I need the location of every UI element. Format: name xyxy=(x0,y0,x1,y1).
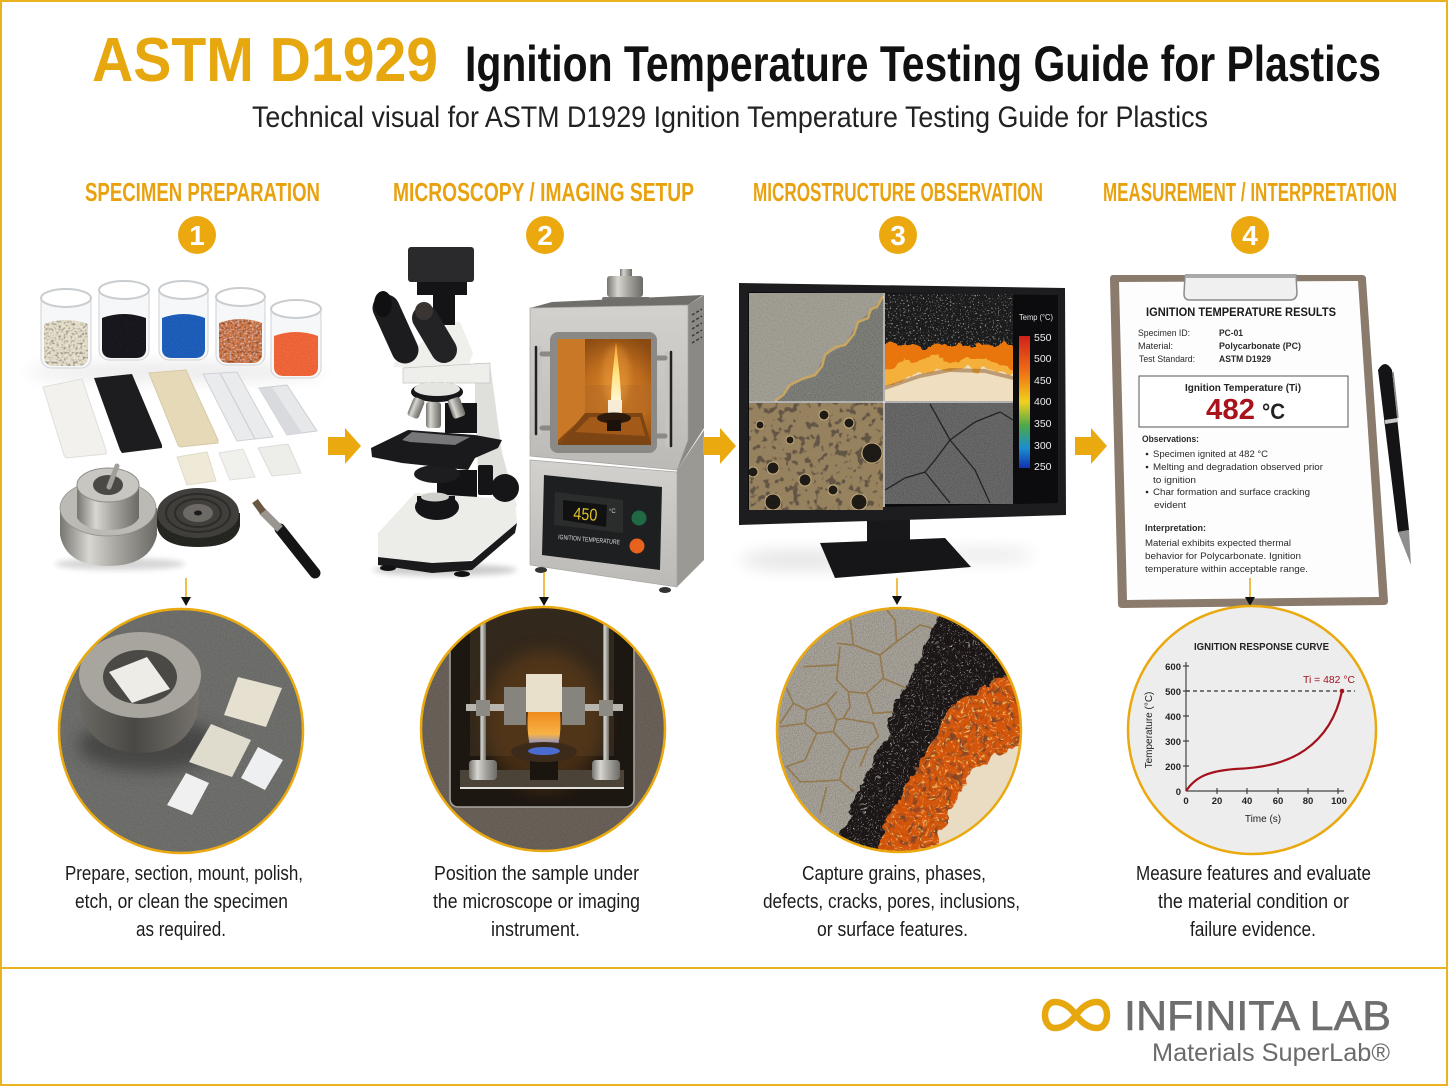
caption: step 1 xyxy=(65,863,303,941)
interpretation: Interpretation: xyxy=(1145,523,1206,534)
specimen details: Specimen ID: xyxy=(1138,328,1190,338)
observations: Char formation and surface cracking xyxy=(1153,487,1310,498)
side vents xyxy=(692,309,702,343)
caption: step 1: as required. xyxy=(136,919,226,941)
axis labels xyxy=(1144,662,1347,825)
plastic test strips xyxy=(43,370,317,485)
caption: step 3: Capture grains, phases, xyxy=(802,863,986,885)
step number 1: 1 xyxy=(189,220,205,251)
observations: Specimen ignited at 482 °C xyxy=(1153,449,1268,460)
axis labels: 40 xyxy=(1242,796,1252,807)
caption: step 4 xyxy=(1136,863,1371,941)
caption: step 4: the material condition or xyxy=(1158,891,1349,913)
micrograph: burn front xyxy=(885,294,1013,401)
icon: metal mounting press xyxy=(60,466,157,566)
axis labels: 0 xyxy=(1176,787,1181,798)
step headings and numbers xyxy=(85,177,1397,254)
title xyxy=(92,26,1381,95)
arrow xyxy=(703,428,736,464)
control panel xyxy=(542,475,662,570)
ignition temperature box: °C xyxy=(1262,399,1285,424)
icon: pen xyxy=(1378,364,1411,565)
detail circle: charred microstructure xyxy=(776,606,1022,854)
camera xyxy=(408,247,474,325)
threshold line xyxy=(1186,690,1355,692)
results heading: IGNITION TEMPERATURE RESULTS xyxy=(1146,307,1336,319)
heading: specimen preparation: SPECIMEN PREPARATION xyxy=(85,177,320,207)
panel: results clipboard xyxy=(1110,274,1388,608)
colour scale: 350 xyxy=(1034,418,1052,430)
panel: ignition chamber xyxy=(530,269,704,593)
step number 4 xyxy=(1231,216,1269,254)
specimen details: Polycarbonate (PC) xyxy=(1219,341,1301,351)
microscope head and arm xyxy=(393,322,517,507)
nosepiece and objectives xyxy=(407,382,466,428)
step number 3: 3 xyxy=(890,220,906,251)
chamber body xyxy=(530,295,703,308)
caption: step 2: instrument. xyxy=(491,919,580,941)
subtitle: Technical visual for ASTM D1929 Ignition Temperature Testing Guide for Plastics xyxy=(252,101,1208,134)
caption: step 2 xyxy=(433,863,640,941)
control panel: 450 xyxy=(573,504,598,525)
interpretation: temperature within acceptable range. xyxy=(1145,564,1308,575)
icon: abrasive disc xyxy=(157,488,240,547)
caption: step 2: the microscope or imaging xyxy=(433,891,640,913)
axis labels: 500 xyxy=(1165,687,1181,698)
ignition temperature box: 482 xyxy=(1206,394,1255,426)
specimen details: Test Standard: xyxy=(1139,354,1195,364)
title: ASTM D1929 xyxy=(92,26,438,95)
detail circle: mounted specimens xyxy=(58,608,304,854)
caption: step 3: defects, cracks, pores, inclusions, xyxy=(763,891,1020,913)
caption: step 4: failure evidence. xyxy=(1190,919,1316,941)
ignition curve xyxy=(1186,691,1342,791)
clipboard clip xyxy=(1184,275,1297,300)
logo: Infinita Lab: Materials SuperLab® xyxy=(1152,1039,1391,1067)
axis labels: 300 xyxy=(1165,737,1181,748)
caption: step 2: Position the sample under xyxy=(434,863,639,885)
axis labels: 200 xyxy=(1165,762,1181,773)
step number 2: 2 xyxy=(537,220,553,251)
axis labels: 80 xyxy=(1303,796,1313,807)
specimen details xyxy=(1138,328,1301,364)
chart title: IGNITION RESPONSE CURVE xyxy=(1194,642,1329,653)
heading: microscopy setup: MICROSCOPY / IMAGING SETUP xyxy=(393,177,694,207)
icon: infinity mark xyxy=(1045,1002,1107,1028)
eyepieces xyxy=(374,291,444,350)
specimen details: PC-01 xyxy=(1219,328,1243,338)
colour scale: 250 xyxy=(1034,461,1052,473)
grain boundary network xyxy=(780,610,940,813)
colour scale: 300 xyxy=(1034,440,1052,452)
caption: step 4: Measure features and evaluate xyxy=(1136,863,1371,885)
axis labels: 100 xyxy=(1331,796,1347,807)
caption: step 3: or surface features. xyxy=(817,919,968,941)
observations: to ignition xyxy=(1153,475,1196,486)
caption: step 3 xyxy=(763,863,1020,941)
icon: brush xyxy=(255,501,315,573)
colour scale: Temp (°C) xyxy=(1019,313,1053,322)
arrow xyxy=(1075,428,1107,464)
connector arrows xyxy=(181,572,1255,606)
observations: evident xyxy=(1154,500,1186,511)
micrograph: cracked surface xyxy=(885,403,1013,504)
logo: Infinita Lab: INFINITA LAB xyxy=(1124,992,1391,1039)
chamber window with flame xyxy=(550,332,657,453)
step number 1 xyxy=(178,216,216,254)
ti label: Ti = 482 °C xyxy=(1303,675,1355,686)
interpretation: behavior for Polycarbonate. Ignition xyxy=(1145,551,1301,562)
axis labels: 600 xyxy=(1165,662,1181,673)
caption: step 1: etch, or clean the specimen xyxy=(75,891,288,913)
panel: monitor xyxy=(739,283,1066,578)
icon: pellet jars xyxy=(41,281,321,378)
detail circle: specimen in flame xyxy=(420,606,666,852)
control panel: °C xyxy=(609,509,616,515)
observations xyxy=(1142,434,1323,511)
chart axes xyxy=(1183,662,1344,794)
axis labels: 0 xyxy=(1183,796,1189,807)
base xyxy=(378,474,519,577)
panel: microscope xyxy=(371,247,519,577)
interpretation xyxy=(1145,523,1308,575)
micrograph: porous surface xyxy=(748,403,883,510)
axis labels: Temperature (°C) xyxy=(1144,692,1155,768)
monitor stand xyxy=(820,518,971,578)
colour scale xyxy=(1019,313,1053,473)
panel: specimen materials and tools xyxy=(25,281,325,573)
arrow xyxy=(328,428,361,464)
step number 2 xyxy=(526,216,564,254)
axis labels: 400 xyxy=(1165,712,1181,723)
chamber nozzle xyxy=(602,269,650,301)
caption: step 1: Prepare, section, mount, polish, xyxy=(65,863,303,885)
ignition temperature box xyxy=(1139,376,1348,427)
heading: microstructure observation: MICROSTRUCTURE OBSERVATION xyxy=(753,177,1043,207)
colour scale: 500 xyxy=(1034,353,1052,365)
step number 3 xyxy=(879,216,917,254)
step number 4: 4 xyxy=(1242,220,1258,251)
detail circle: ignition response curve chart xyxy=(1128,606,1376,854)
specimen details: Material: xyxy=(1138,341,1173,351)
micrograph: crack boundary xyxy=(749,293,883,401)
specimen details: ASTM D1929 xyxy=(1219,354,1271,364)
observations: Melting and degradation observed prior xyxy=(1153,462,1323,473)
colour scale: 400 xyxy=(1034,396,1052,408)
axis labels: 60 xyxy=(1273,796,1283,807)
handles xyxy=(536,347,671,446)
ignition temperature box: Ignition Temperature (Ti) xyxy=(1185,382,1301,394)
stage xyxy=(371,430,502,498)
axis labels: Time (s) xyxy=(1245,814,1281,825)
observations: Observations: xyxy=(1142,434,1199,445)
monitor bezel xyxy=(739,283,1066,525)
axis labels: 20 xyxy=(1212,796,1222,807)
colour scale: 550 xyxy=(1034,332,1052,344)
metal ring mount xyxy=(79,632,201,753)
interpretation: Material exhibits expected thermal xyxy=(1145,538,1291,549)
logo: Infinita Lab xyxy=(1045,992,1391,1067)
colour scale: 450 xyxy=(1034,375,1052,387)
control panel: IGNITION TEMPERATURE xyxy=(558,534,621,546)
